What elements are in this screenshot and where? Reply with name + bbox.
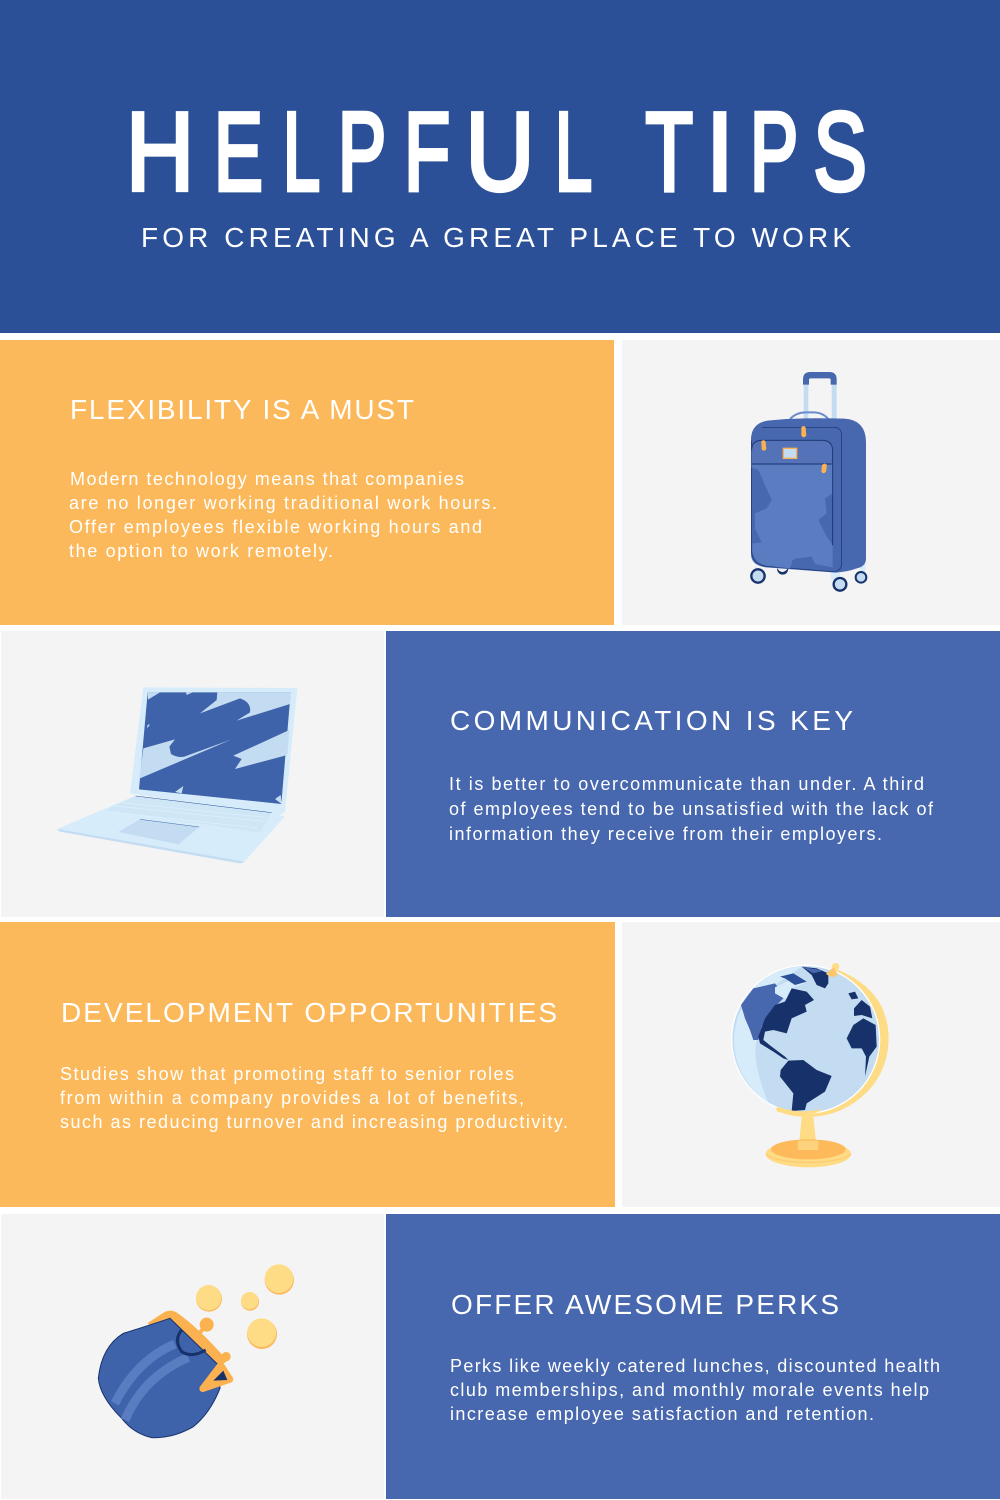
body: development [60,1064,568,1132]
sphere [732,966,879,1113]
heading: development: DEVELOPMENT OPPORTUNITIES [61,997,557,1028]
body: perks: Perks like weekly catered lunches, discounted health [450,1356,940,1376]
body: flexibility: Offer employees flexible working hours and [69,517,482,537]
title: E [214,90,263,214]
subtitle: FOR CREATING A GREAT PLACE TO WORK [141,222,851,253]
body: flexibility: the option to work remotely. [69,541,333,561]
title: S [814,90,867,214]
body: communication: information they receive from their employers. [449,824,882,844]
title: P [750,89,798,214]
bag [98,1318,220,1438]
continents [741,983,785,1040]
body: development: Studies show that promoting staff to senior roles [60,1064,514,1084]
title: F [404,91,450,215]
icon: suitcase [751,372,866,591]
body: flexibility [69,469,497,561]
body: communication: of employees tend to be unsatisfied with the lack of [449,799,934,819]
body: flexibility: Modern technology means that companies [70,469,464,489]
title: U [466,89,534,214]
panel: perks text [386,1214,1000,1499]
title: I [706,90,734,214]
panel: purse [1,1214,384,1499]
body: development: such as reducing turnover and increasing productivity. [60,1112,568,1132]
body: perks: club memberships, and monthly morale events help [450,1380,929,1400]
lighter front pocket [752,464,833,568]
title: H [126,90,194,214]
body: communication: It is better to overcommunicate than under. A third [449,774,924,794]
icon: globe [731,963,889,1167]
body: flexibility: are no longer working traditional work hours. [69,493,497,513]
panel: development text [0,922,615,1207]
title: L [555,91,592,214]
heading: flexibility: FLEXIBILITY IS A MUST [70,394,414,425]
panel: flexibility text [0,340,614,625]
body: communication [449,774,934,844]
header panel [0,0,1000,333]
heading: perks: OFFER AWESOME PERKS [451,1289,839,1320]
icon: coin purse [98,1264,294,1438]
body: development: from within a company provides a lot of benefits, [60,1088,524,1108]
screen [139,692,291,804]
stand [799,1117,816,1142]
panel: laptop [1,631,384,917]
body: perks: increase employee satisfaction and retention. [450,1404,874,1424]
coins [196,1264,294,1349]
title [126,89,867,215]
panel: globe [622,922,1000,1207]
icon: laptop [57,687,297,863]
title: L [283,91,320,214]
panel: suitcase [622,340,1000,625]
title: P [338,89,386,214]
body: perks [450,1356,940,1424]
arm [776,970,889,1117]
title: T [646,90,693,214]
panel: communication text [386,631,1000,917]
heading: communication: COMMUNICATION IS KEY [450,705,853,736]
